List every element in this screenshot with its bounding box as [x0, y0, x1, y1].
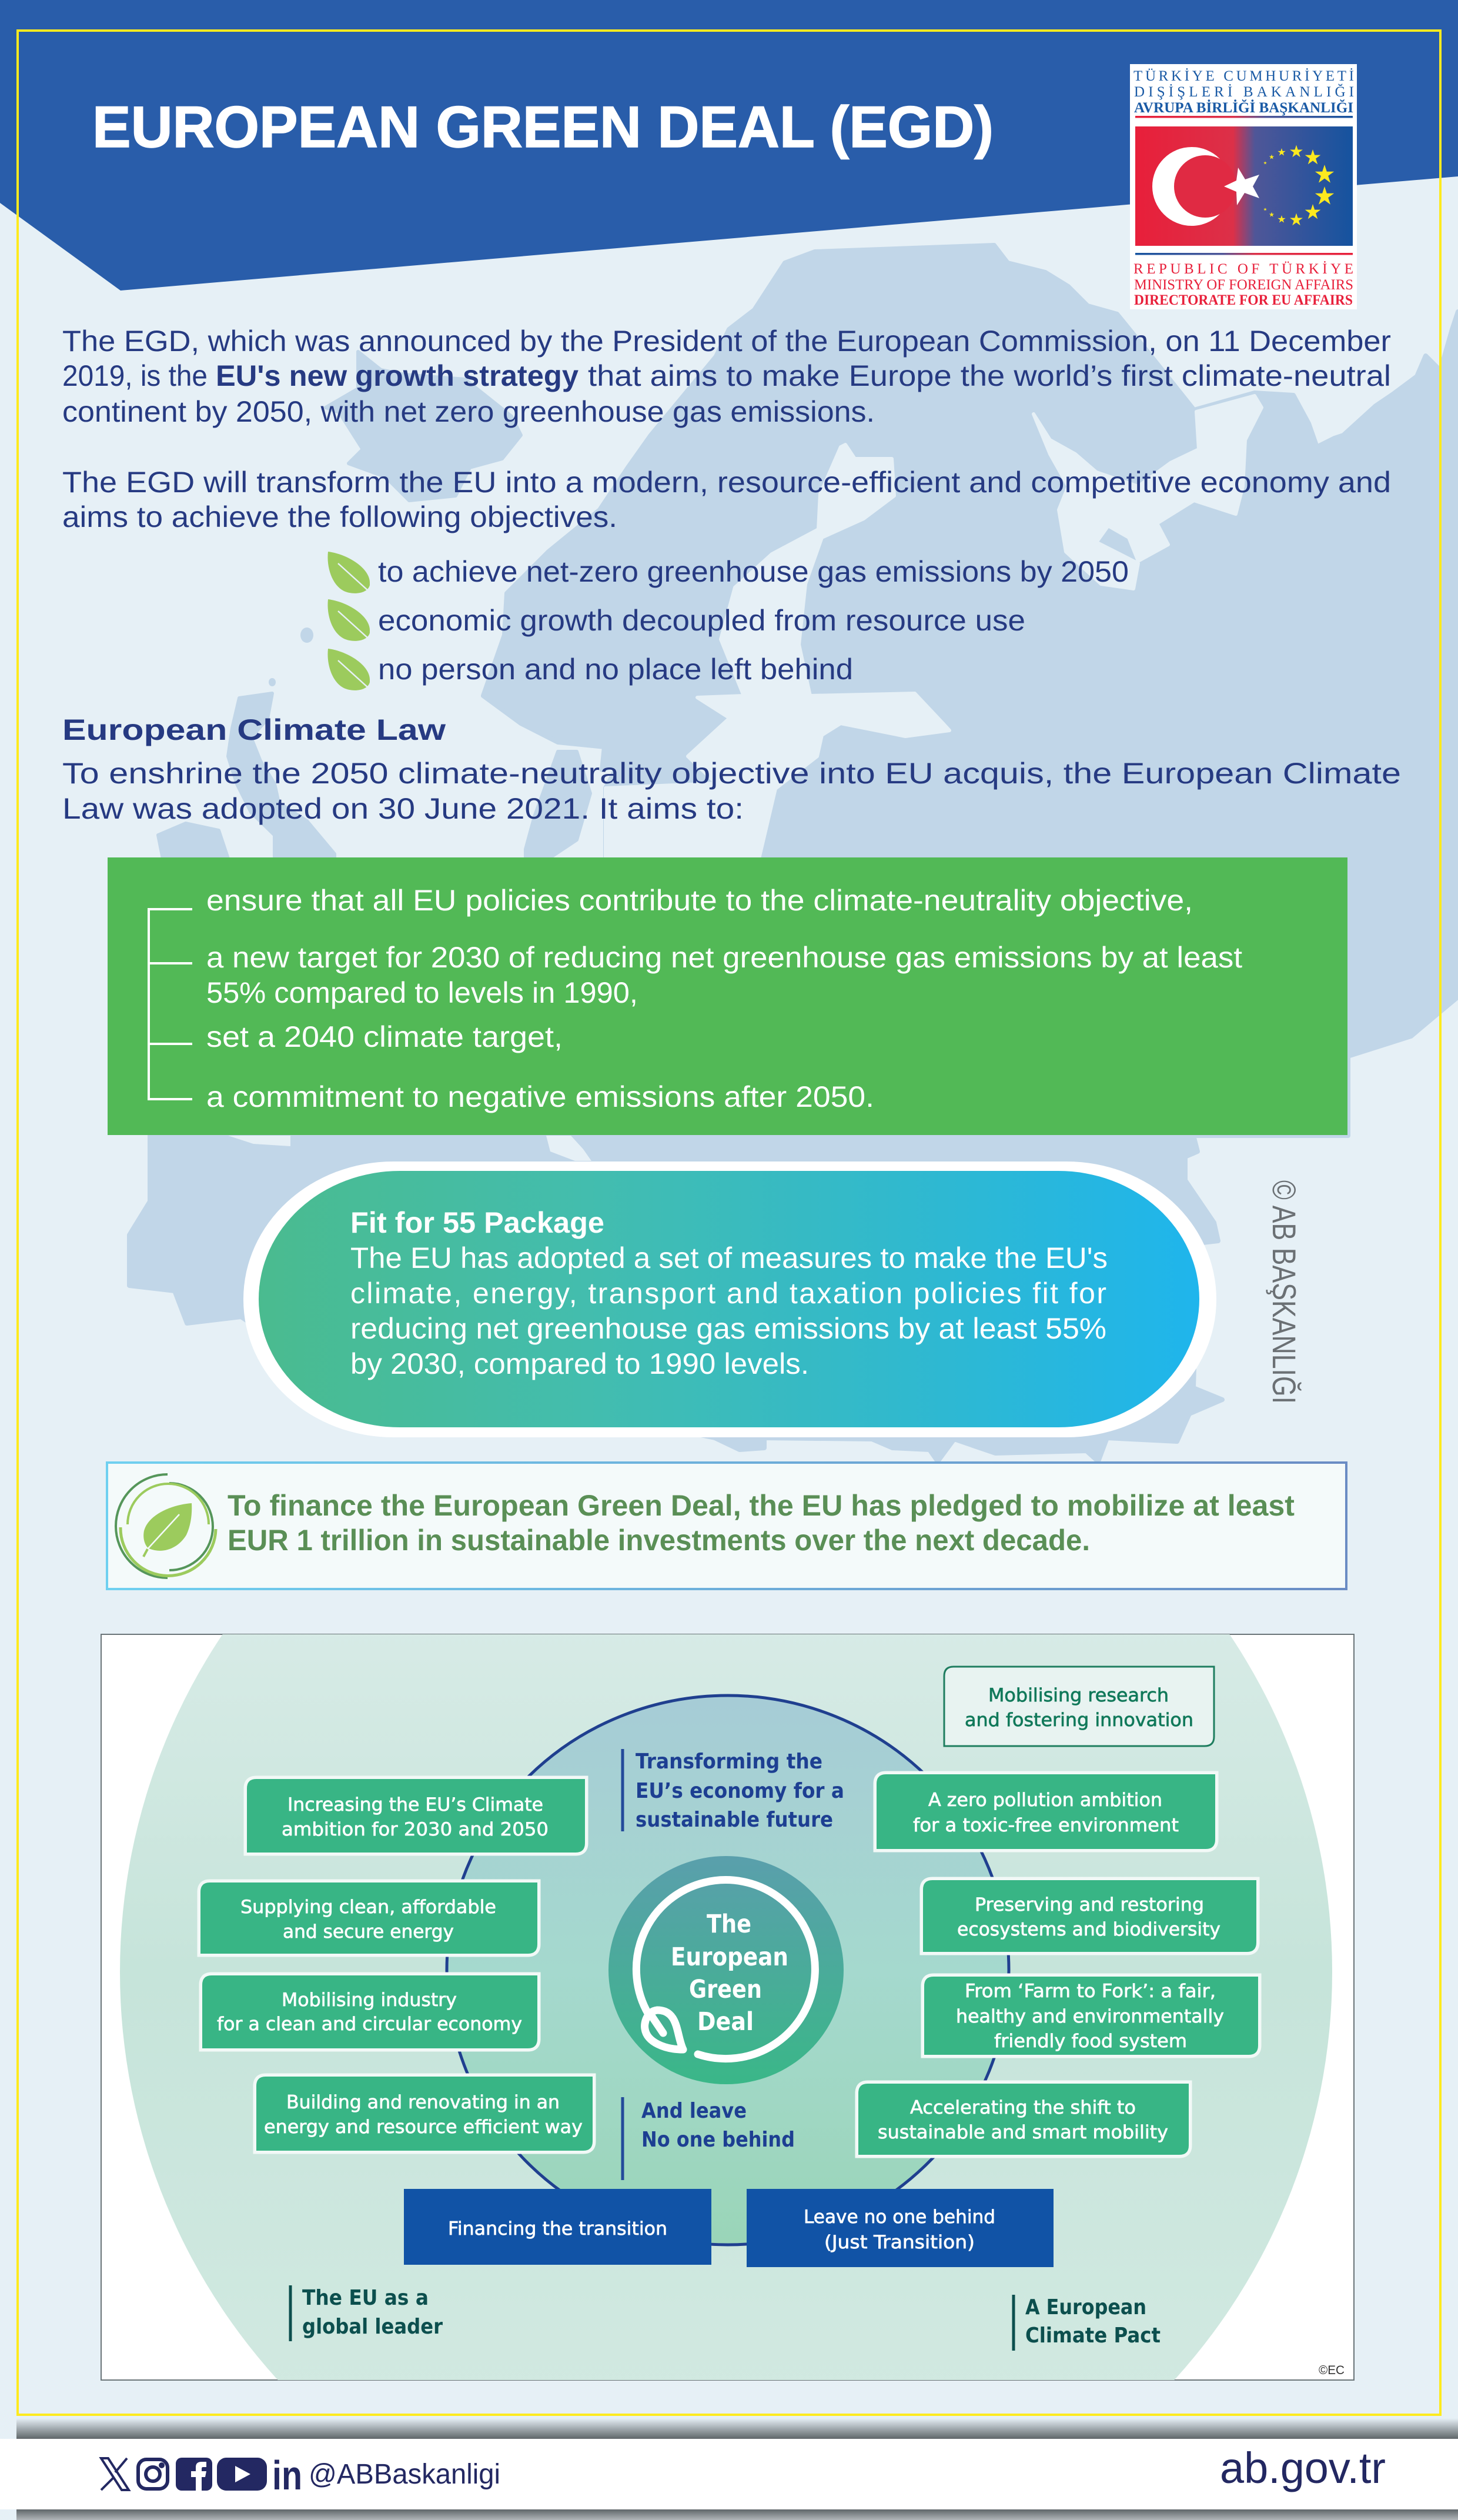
box: Building and renovating	[256, 2077, 593, 2151]
box: Supplying clean energy: and secure energy	[283, 1921, 454, 1942]
icon: LinkedIn: in	[272, 2452, 302, 2498]
aims list: 55% compared to levels in 1990,	[206, 976, 638, 1009]
aims list	[206, 884, 1242, 1113]
icon: core leaf	[645, 2010, 683, 2050]
climate law text: To enshrine the 2050 climate-neutrality objective into EU acquis, the European Climate	[62, 757, 1401, 790]
box: Financing the transition	[404, 2189, 711, 2265]
logo: Directorate for EU Affairs	[1130, 64, 1357, 309]
box: Mobilising industry: for a clean and circular economy	[217, 2014, 522, 2035]
intro paragraph	[62, 325, 1391, 428]
icon: leaf bullet 2	[327, 599, 374, 642]
label: Transforming the EU's economy: EU’s economy for a	[636, 1779, 844, 1803]
label: The EU as a global leader: global leader	[302, 2315, 443, 2339]
box: Preserving ecosystems: ecosystems and biodiversity	[957, 1919, 1220, 1940]
box: Supplying clean energy: Supplying clean, affordable	[240, 1897, 496, 1918]
label: And leave no one behind	[621, 2097, 795, 2180]
label: The EU as a global leader: The EU as a	[302, 2286, 429, 2310]
box: Increasing climate ambition: ambition for 2030 and 2050	[282, 1819, 549, 1840]
logo English name: DIRECTORATE FOR EU AFFAIRS	[1134, 292, 1353, 308]
copyright credit: © AB BAŞKANLIĞI	[1266, 1180, 1303, 1404]
box: Leave no one behind	[747, 2189, 1054, 2267]
box: Farm to Fork: From ‘Farm to Fork’: a fair,	[965, 1981, 1216, 2002]
icon: Facebook	[176, 2458, 212, 2491]
objectives paragraph	[62, 466, 1391, 533]
label: Transforming the EU's economy	[621, 1749, 844, 1832]
diagram core: The European Green Deal: Deal	[697, 2007, 754, 2037]
diagram core: The European Green Deal: Green	[689, 1975, 762, 2004]
box: Increasing climate ambition: Increasing the EU’s Climate	[287, 1794, 543, 1815]
box: Mobilising industry	[202, 1975, 537, 2048]
box: Mobilising research	[944, 1667, 1214, 1746]
box: Preserving ecosystems: Preserving and restoring	[975, 1894, 1204, 1915]
intro paragraph: continent by 2050, with net zero greenhouse gas emissions.	[62, 395, 875, 428]
label: Transforming the EU's economy: sustainable future	[636, 1808, 833, 1832]
diagram core: The European Green Deal: The	[707, 1910, 751, 1939]
box: Accelerating mobility: sustainable and smart mobility	[878, 2122, 1168, 2143]
panel: Green Deal diagram	[101, 1634, 1355, 2381]
objectives list	[327, 552, 1129, 691]
box: Zero pollution	[877, 1774, 1215, 1849]
logo English name: MINISTRY OF FOREIGN AFFAIRS	[1134, 277, 1353, 293]
logo Turkish name: AVRUPA BİRLİĞİ BAŞKANLIĞI	[1134, 99, 1353, 116]
box: Accelerating mobility: Accelerating the shift to	[910, 2097, 1136, 2118]
box: Building and renovating: energy and resource efficient way	[264, 2117, 583, 2138]
box: Preserving ecosystems	[923, 1880, 1256, 1952]
Fit for 55 text: reducing net greenhouse gas emissions by at least 55%	[350, 1312, 1106, 1345]
social handle: @ABBaskanligi	[309, 2459, 500, 2490]
objectives list: to achieve net-zero greenhouse gas emissions by 2050	[378, 555, 1129, 588]
box: Farm to Fork	[924, 1977, 1258, 2055]
heading: European Climate Law: European Climate Law	[62, 713, 446, 746]
box: Zero pollution: for a toxic-free environment	[913, 1815, 1179, 1836]
panel: climate law aims	[108, 857, 1347, 1135]
label: The EU as a global leader	[289, 2285, 443, 2341]
panel: financing callout	[107, 1463, 1346, 1589]
Fit for 55 text: The EU has adopted a set of measures to make the EU's	[350, 1241, 1108, 1274]
box: Leave no one behind: Leave no one behind	[804, 2207, 995, 2228]
icon: YouTube	[217, 2458, 267, 2491]
logo Turkish name: TÜRKİYE CUMHURİYETİ	[1133, 68, 1354, 84]
Fit for 55 text: by 2030, compared to 1990 levels.	[350, 1347, 809, 1380]
objectives list: economic growth decoupled from resource use	[378, 604, 1025, 637]
aims list: a commitment to negative emissions after 2050.	[206, 1080, 874, 1113]
box: Mobilising industry: Mobilising industry	[282, 1990, 457, 2011]
logo Turkish name: DIŞİŞLERİ BAKANLIĞI	[1134, 84, 1354, 100]
label: A European Climate Pact	[1012, 2295, 1161, 2351]
climate law text: Law was adopted on 30 June 2021. It aims to:	[62, 792, 744, 825]
box: Building and renovating: Building and renovating in an	[286, 2092, 560, 2113]
intro paragraph: 2019, is the	[62, 359, 208, 392]
financing text: To finance the European Green Deal, the EU has pledged to mobilize at least	[228, 1489, 1295, 1522]
icon: leaf bullet 1	[327, 552, 374, 594]
aims list: set a 2040 climate target,	[206, 1020, 563, 1053]
intro paragraph: The EGD, which was announced by the President of the European Commission, on 11 December	[62, 325, 1391, 358]
aims list: a new target for 2030 of reducing net greenhouse gas emissions by at least	[206, 941, 1242, 974]
box: Zero pollution: A zero pollution ambition	[928, 1790, 1162, 1811]
title: EUROPEAN GREEN DEAL (EGD)	[92, 94, 994, 159]
box: Financing the transition: Financing the transition	[448, 2218, 667, 2239]
bracket connector	[149, 909, 192, 1099]
diagram core: The European Green Deal	[608, 1856, 844, 2084]
box: Accelerating mobility	[858, 2084, 1189, 2155]
financing text: EUR 1 trillion in sustainable investments over the next decade.	[228, 1524, 1090, 1557]
logo English name: REPUBLIC OF TÜRKİYE	[1133, 261, 1353, 277]
icon: Instagram	[138, 2459, 168, 2489]
label: And leave no one behind: And leave	[641, 2099, 747, 2123]
footer	[0, 2418, 1458, 2520]
box: Leave no one behind: (Just Transition)	[824, 2232, 975, 2253]
box: Farm to Fork: healthy and environmentally	[956, 2006, 1224, 2027]
box: Mobilising research: Mobilising research	[988, 1685, 1169, 1706]
logo English name	[1133, 261, 1353, 308]
Fit for 55 text	[350, 1241, 1108, 1380]
diagram outer circle	[120, 1634, 1332, 2380]
diagram inner circle	[447, 1695, 1009, 2245]
Fit for 55 text: climate, energy, transport and taxation policies fit for	[350, 1277, 1106, 1310]
image credit: ©EC	[1319, 2364, 1345, 2377]
label: A European Climate Pact: A European	[1025, 2295, 1146, 2319]
label: And leave no one behind: No one behind	[641, 2128, 795, 2152]
logo flag emblem	[1135, 126, 1353, 246]
label: Transforming the EU's economy: Transforming the	[636, 1750, 822, 1774]
icon: leaf in circle	[116, 1474, 216, 1578]
icon: leaf bullet 3	[327, 649, 374, 691]
icon: X	[101, 2458, 129, 2490]
Fit for 55 heading: Fit for 55 Package	[350, 1206, 604, 1239]
background map of Europe	[129, 245, 1458, 1461]
logo Turkish name	[1133, 68, 1354, 116]
box: Farm to Fork: friendly food system	[994, 2031, 1187, 2052]
climate law text	[62, 757, 1401, 825]
box: Supplying clean energy	[200, 1883, 537, 1954]
header banner	[0, 0, 1458, 291]
box: Mobilising research: and fostering innovation	[965, 1710, 1193, 1731]
intro paragraph: that aims to make Europe the world’s first climate-neutral	[588, 359, 1391, 392]
website: ab.gov.tr	[1220, 2444, 1386, 2492]
diagram core: The European Green Deal: European	[671, 1942, 788, 1972]
financing text	[228, 1489, 1295, 1557]
aims list: ensure that all EU policies contribute to the climate-neutrality objective,	[206, 884, 1193, 917]
box: Increasing climate ambition	[247, 1779, 585, 1853]
label: A European Climate Pact: Climate Pact	[1025, 2324, 1161, 2348]
panel: Fit for 55 Package	[243, 1161, 1216, 1437]
intro paragraph: EU's new growth strategy	[216, 359, 578, 392]
objectives paragraph: The EGD will transform the EU into a modern, resource-efficient and competitive economy and	[62, 466, 1391, 499]
objectives list: no person and no place left behind	[378, 653, 853, 686]
objectives paragraph: aims to achieve the following objectives.	[62, 500, 617, 533]
